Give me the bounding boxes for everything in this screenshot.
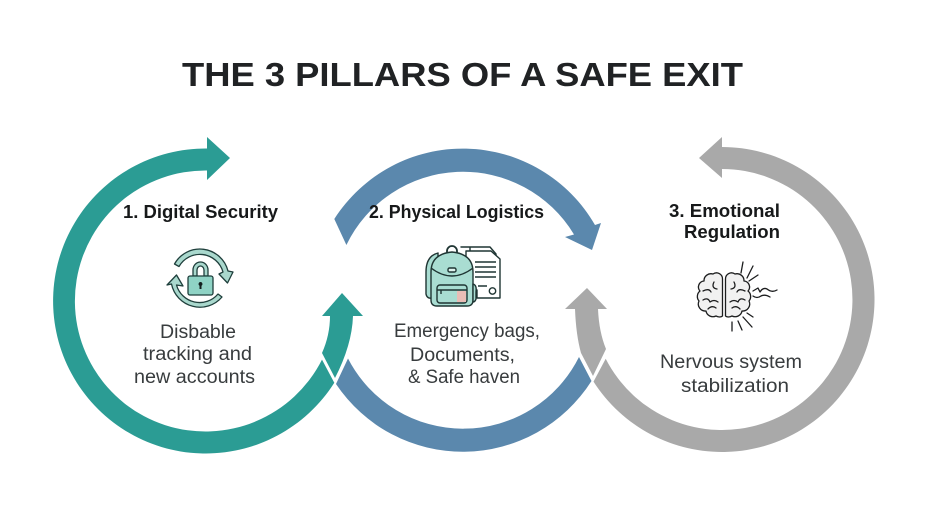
heading: physical logistics: 2. Physical Logistics: [369, 201, 544, 222]
text: digital security description: [134, 322, 255, 388]
arrow: teal ring: [53, 137, 334, 453]
text: emotional regulation description: Nervous system: [660, 352, 802, 373]
arrow: gray rising head: [565, 288, 607, 376]
heading: emotional regulation: 3. Emotional: [669, 200, 780, 221]
text: physical logistics description: Emergency bags,: [394, 321, 540, 342]
panel: physical logistics: [334, 149, 601, 452]
arrow: blue lower arc: [336, 357, 592, 452]
icon: backpack and documents: [426, 246, 500, 306]
panel: digital security: [53, 137, 363, 453]
arrow: teal rising head: [322, 293, 363, 378]
text: digital security description: tracking and: [143, 344, 252, 365]
text: physical logistics description: & Safe haven: [408, 367, 520, 388]
text: digital security description: new accounts: [134, 367, 255, 388]
text: emotional regulation description: stabilization: [681, 376, 789, 397]
heading: emotional regulation: Regulation: [684, 221, 780, 242]
arrow: blue upper arc: [334, 149, 601, 250]
icon: padlock with cycle arrows: [167, 249, 233, 307]
panel: emotional regulation: [565, 137, 875, 452]
heading: emotional regulation: [669, 200, 780, 242]
text: physical logistics description: [394, 321, 540, 388]
text: emotional regulation description: [660, 352, 802, 397]
text: digital security description: Disbable: [160, 322, 236, 343]
title: THE 3 PILLARS OF A SAFE EXIT: [182, 57, 744, 94]
text: physical logistics description: Documents,: [410, 345, 515, 366]
arrow: gray ring: [594, 137, 875, 452]
heading: digital security: 1. Digital Security: [123, 201, 279, 222]
icon: brain with signal lines: [697, 262, 777, 331]
